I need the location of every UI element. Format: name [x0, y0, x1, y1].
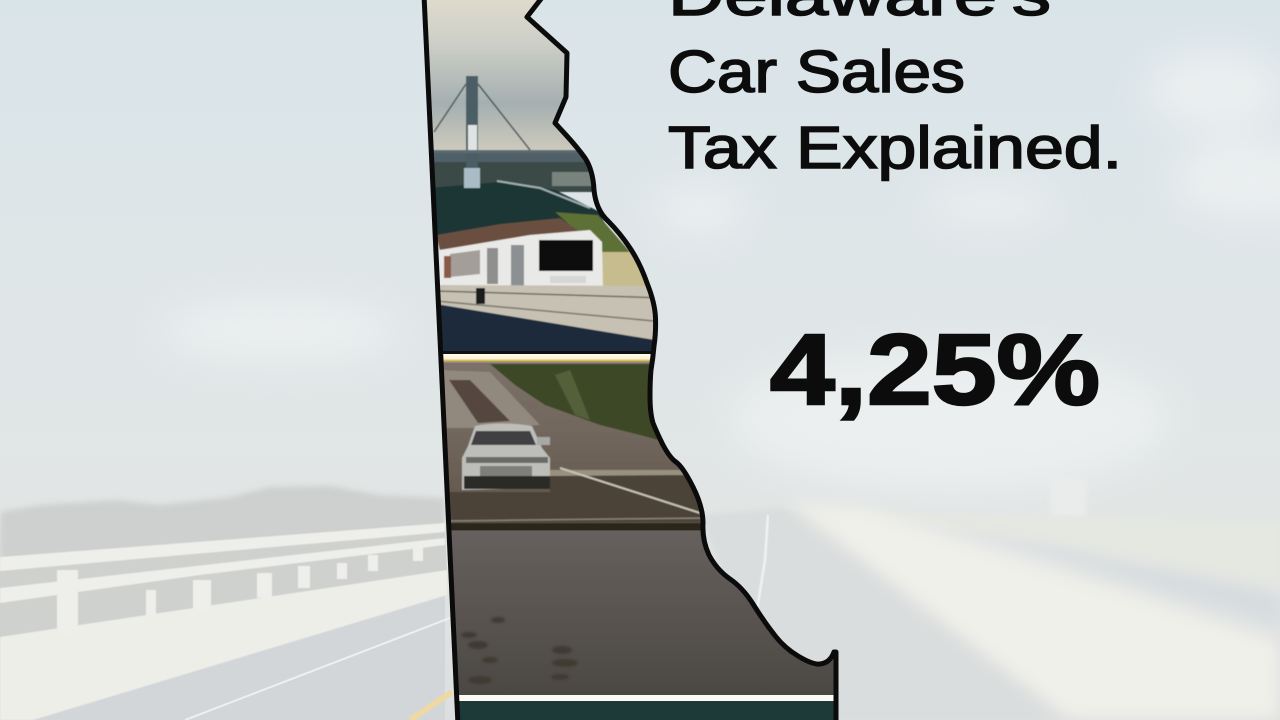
Delaware state map filled with photo collage [420, 0, 850, 720]
right lane line [757, 515, 768, 610]
bright road shoulder right [790, 505, 1280, 720]
distant tree line [0, 486, 445, 565]
title: Car Sales [668, 39, 965, 105]
road surface left [0, 540, 445, 720]
clouds [160, 50, 1280, 490]
far field right [830, 512, 1280, 600]
gap behind rails [0, 530, 447, 640]
black band above divider [436, 351, 662, 354]
shoulder left [0, 570, 447, 720]
state outline [424, 0, 836, 720]
gold-white divider bar [436, 354, 662, 362]
photo: asphalt close-up [440, 531, 850, 696]
photo: white train [436, 212, 665, 356]
distant truck [1050, 478, 1086, 516]
guard rails [0, 523, 445, 633]
title: Tax Explained. [668, 115, 1122, 181]
photo: suspension bridge [426, 0, 604, 236]
white divider bar [450, 695, 836, 701]
left lane line [185, 618, 450, 720]
far road band [930, 525, 1280, 626]
photo: car on country road [436, 362, 716, 531]
road surface right [700, 508, 1280, 720]
photo: dark water strip [450, 701, 836, 720]
car [462, 424, 550, 490]
yellow centre line [410, 692, 452, 720]
tax rate figure: 4,25% [770, 314, 1100, 426]
title [668, 0, 1122, 181]
